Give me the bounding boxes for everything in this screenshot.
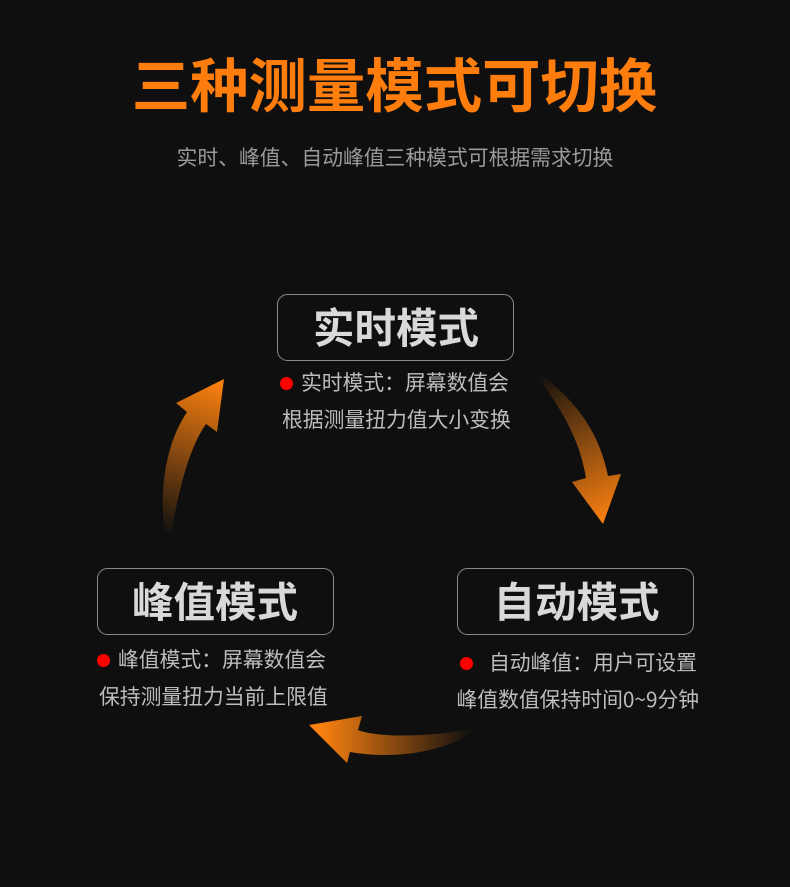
panel: auto mode (456, 568, 699, 713)
peak description line 2: 保持测量扭力当前上限值 (99, 680, 328, 710)
auto heading: 自动模式 (493, 569, 660, 629)
peak description line 1: 峰值模式：屏幕数值会 (118, 643, 326, 673)
real-time description line 2: 根据测量扭力值大小变换 (282, 403, 511, 433)
real-time bullet (280, 377, 293, 390)
real-time heading box (278, 294, 514, 360)
title: 三种测量模式可切换 (132, 39, 657, 124)
subtitle: 实时、峰值、自动峰值三种模式可根据需求切换 (177, 141, 614, 171)
peak heading: 峰值模式 (132, 569, 298, 629)
panel: real-time mode (278, 294, 514, 433)
auto description line 1: 自动峰值：用户可设置 (489, 646, 697, 676)
panel: peak mode (97, 568, 334, 710)
auto heading box (458, 568, 694, 634)
real-time description line 1: 实时模式：屏幕数值会 (301, 366, 509, 396)
arrow: real-time to auto (537, 375, 621, 524)
auto description line 2: 峰值数值保持时间0~9分钟 (456, 683, 699, 713)
peak heading box (98, 568, 334, 634)
real-time heading: 实时模式 (313, 295, 479, 355)
peak bullet (97, 654, 110, 667)
arrow: peak to real-time (163, 379, 224, 536)
auto bullet (460, 657, 473, 670)
arrow: auto to peak (309, 716, 473, 763)
